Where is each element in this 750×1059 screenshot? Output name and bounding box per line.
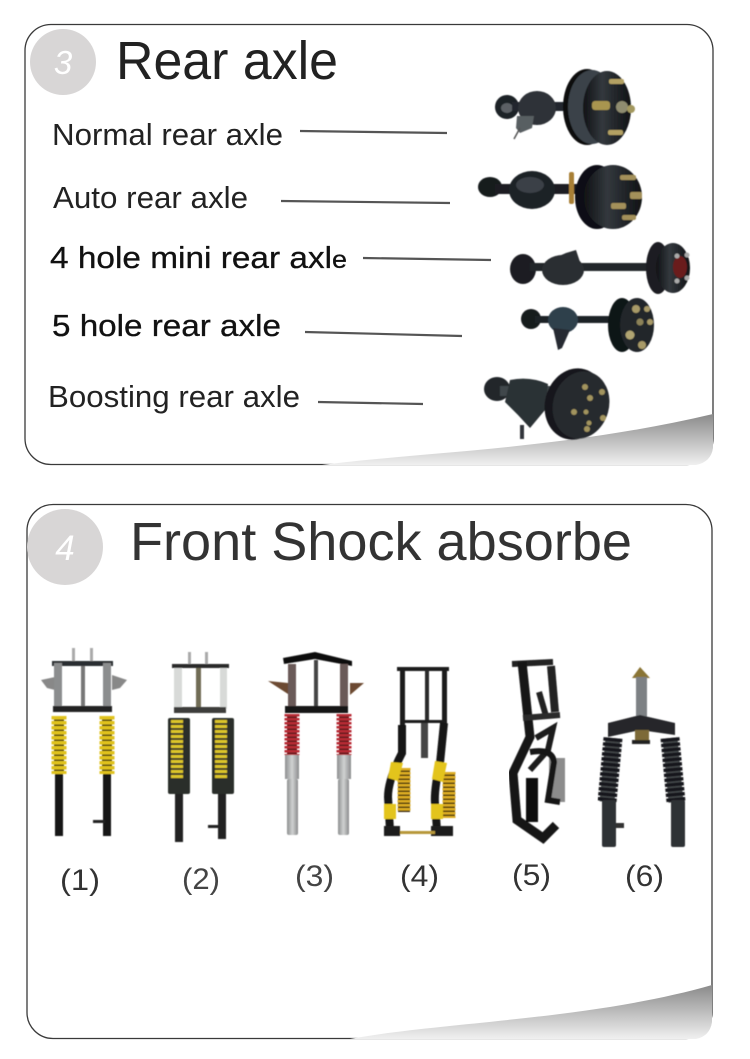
image: normal rear axle: [495, 69, 635, 145]
image: 5 hole rear axle: [521, 298, 654, 352]
image: fork 3: [268, 652, 364, 835]
panel: rear axle: [25, 24, 713, 465]
label: (6): (6): [625, 860, 664, 893]
number badge 4: 4: [55, 529, 75, 568]
heading: rear axle: Rear axle: [116, 31, 338, 91]
label: (4): (4): [400, 860, 439, 893]
label: 4 hole mini rear axle: 4 hole mini rear axl e: [50, 240, 347, 275]
label: 5 hole rear axle: [52, 308, 462, 343]
label: normal rear axle: Normal rear axle: [52, 117, 283, 152]
label: boosting rear axle: Boosting rear axle: [48, 379, 300, 414]
panel shadow wedge: [322, 414, 713, 465]
image: fork 4: [384, 667, 455, 836]
panel: front shock absorbe: [27, 504, 712, 1039]
label: auto rear axle: Auto rear axle: [53, 180, 248, 215]
label: (2): (2): [182, 863, 220, 896]
label: 5 hole rear axle: 5 hole rear axle: [52, 308, 281, 343]
image: fork 2: [168, 652, 234, 842]
image: boosting rear axle: [484, 361, 617, 447]
image: fork 1: [41, 648, 127, 836]
number badge 4: [27, 509, 103, 585]
image: auto rear axle: [478, 165, 642, 229]
image: fork 6: [602, 667, 685, 847]
image: fork 5: [512, 662, 565, 838]
image: 4 hole mini rear axle: [510, 242, 690, 294]
label: (5): (5): [512, 859, 551, 892]
number badge 3: [30, 29, 96, 95]
number badge 3: 3: [54, 44, 73, 81]
label: (1): (1): [60, 864, 100, 897]
label: (3): (3): [295, 860, 334, 893]
heading: front shock absorbe: Front Shock absorbe: [130, 512, 632, 572]
panel shadow wedge: [350, 985, 712, 1039]
